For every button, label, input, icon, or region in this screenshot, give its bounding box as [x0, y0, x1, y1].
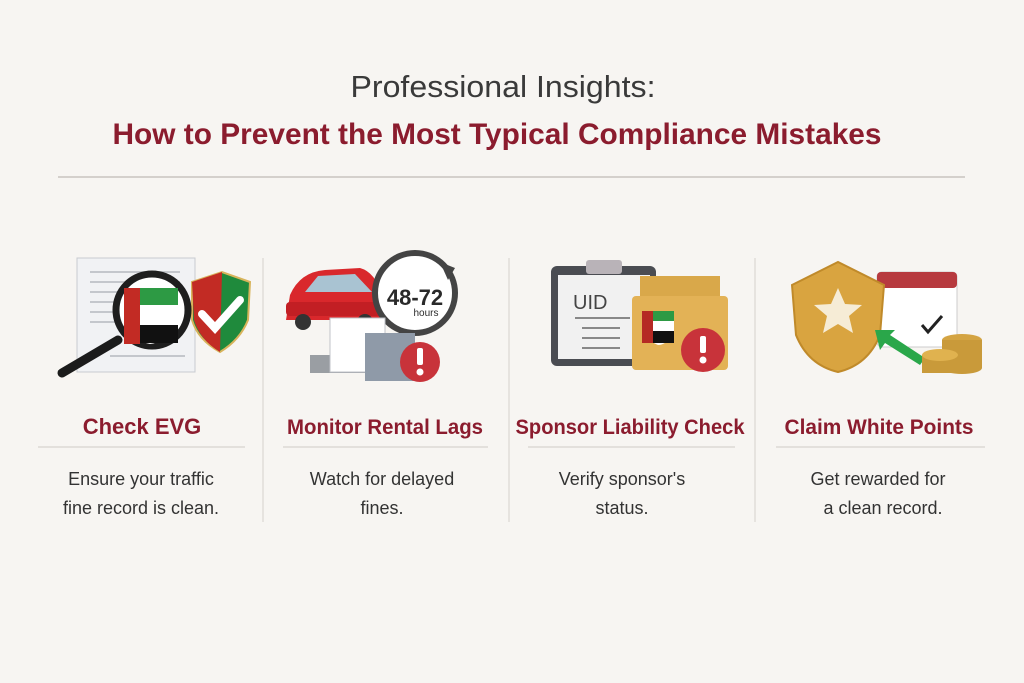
panel: white points — [776, 262, 985, 518]
heading: Monitor Rental Lags — [287, 416, 483, 439]
icon: clipboard and folder: UID — [573, 292, 607, 314]
icon: car, clock, documents — [286, 253, 455, 382]
text block: fines. — [360, 498, 404, 518]
text block: fine record is clean. — [63, 498, 219, 518]
icon: car, clock, documents: hours — [413, 308, 439, 319]
text block: Ensure your traffic — [68, 469, 214, 489]
text block: Verify sponsor's — [559, 469, 685, 489]
icon: document with magnifier and shield — [62, 258, 250, 373]
title: Professional Insights: — [350, 69, 656, 104]
icon: shield, calendar, coins — [792, 262, 982, 374]
text block: Get rewarded for — [810, 469, 946, 489]
heading: Check EVG — [83, 414, 201, 439]
panel: monitor rental lags — [283, 253, 488, 518]
text block: status. — [595, 498, 649, 518]
heading: Claim White Points — [784, 416, 974, 439]
panel: check EVG — [38, 258, 250, 518]
text block: Watch for delayed — [310, 469, 454, 489]
title — [112, 69, 882, 151]
icon: car, clock, documents: 48-72 — [387, 285, 443, 310]
text block: a clean record. — [823, 498, 943, 518]
title: How to Prevent the Most Typical Compliance Mistakes — [112, 118, 882, 151]
heading: Sponsor Liability Check — [516, 416, 745, 439]
panel: sponsor liability — [516, 260, 745, 518]
icon: clipboard and folder — [551, 260, 728, 372]
